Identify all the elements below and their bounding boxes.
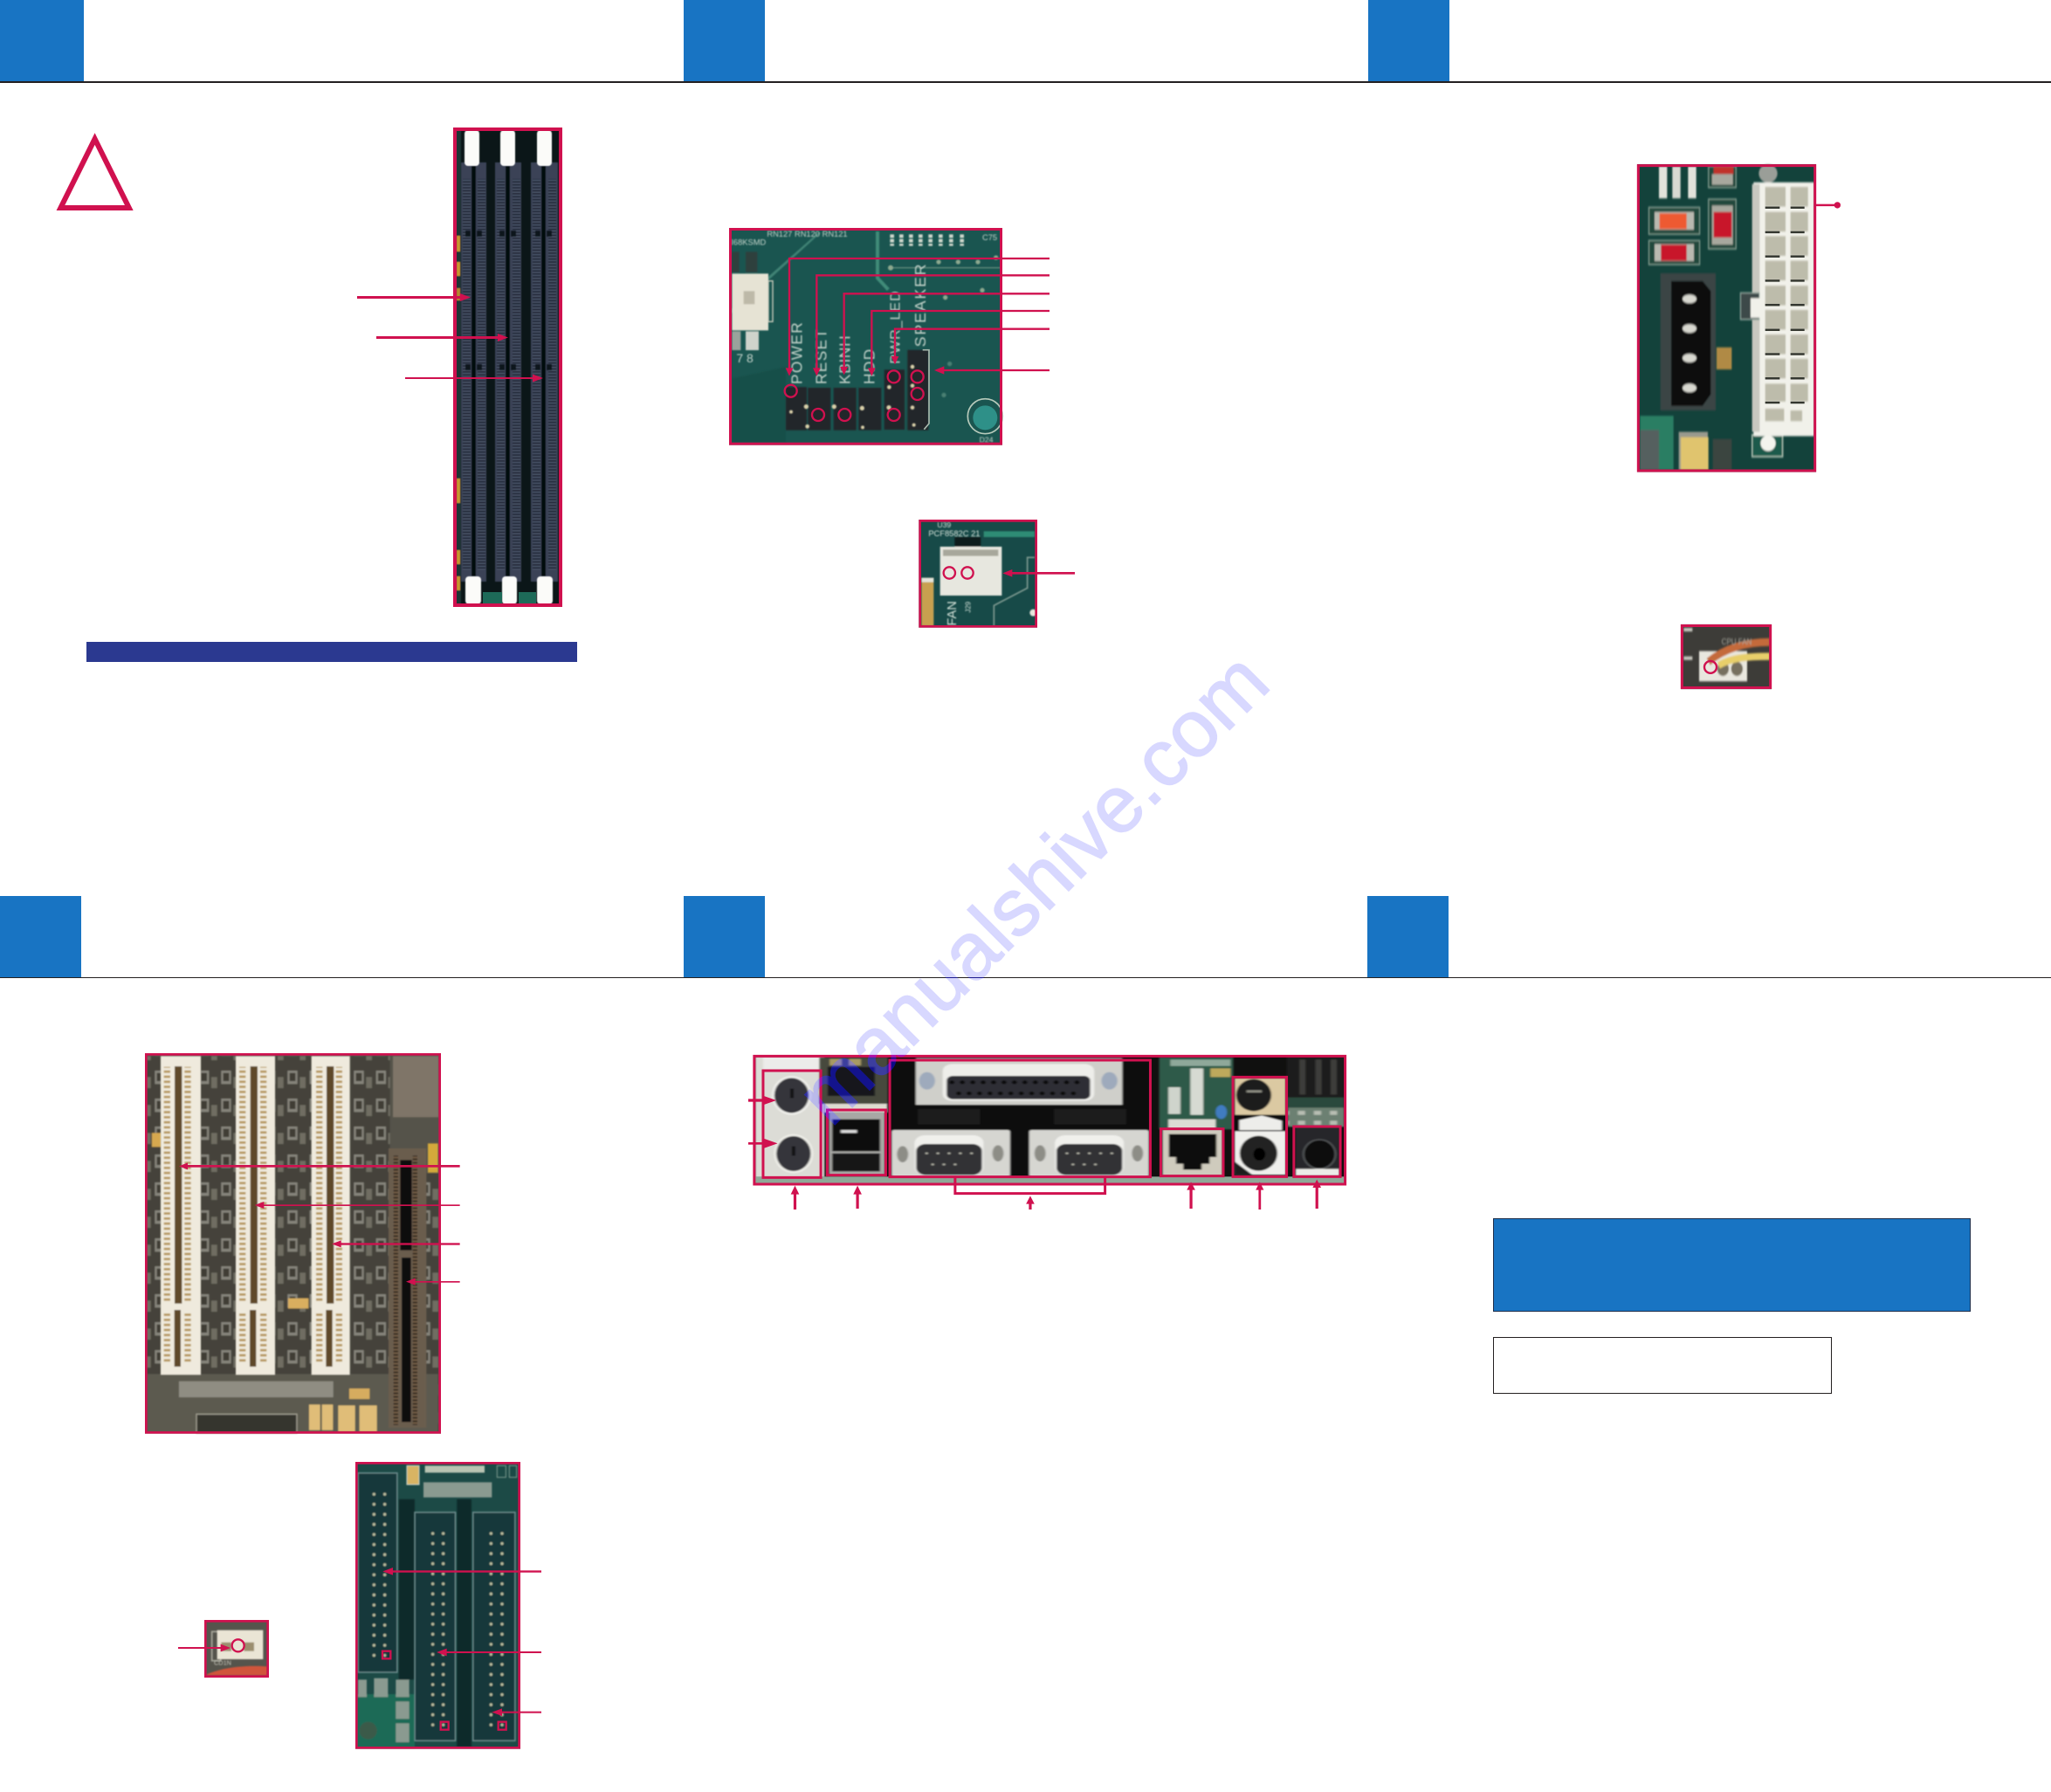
photo silkscreen labels: KBINH (836, 335, 853, 384)
arrow: slot 3 (405, 374, 543, 383)
leader lines (789, 258, 1050, 373)
white power connector (732, 252, 773, 350)
arrow: jack (1312, 1180, 1321, 1209)
PCI slot 3 (312, 1056, 350, 1375)
photo silkscreen labels (731, 230, 997, 445)
power photo components (1640, 164, 1814, 470)
board details (356, 1465, 517, 1748)
arrow: PS/2 lower (748, 1139, 778, 1148)
photo silkscreen labels: PWR_LED (889, 290, 904, 364)
fan photo details: J29 (965, 601, 973, 613)
arrow: network (1187, 1182, 1195, 1209)
CPU fan photo details: CPU FAN (1722, 637, 1752, 646)
section 6 number block (1367, 896, 1449, 977)
PCI slot 1 (161, 1056, 201, 1375)
photo bottom edge (755, 1176, 1345, 1183)
USB stack (820, 1058, 888, 1176)
IDE header 2 (473, 1513, 515, 1740)
fan pin circles (944, 567, 974, 579)
section 4 header (0, 896, 2051, 978)
section 1 header (0, 0, 2051, 83)
panel: CPU fan photo (1681, 624, 1772, 689)
leader arrowheads (786, 356, 944, 376)
floppy header (358, 1473, 397, 1672)
PS/2 plate (755, 1057, 824, 1177)
arrow: floppy (382, 1568, 541, 1575)
AGP slot (389, 1148, 426, 1428)
arrow: slot 2 (376, 334, 508, 341)
green board with LEDs (1160, 1058, 1233, 1129)
photo shading (731, 231, 1001, 443)
arrow: audio (1256, 1182, 1263, 1210)
photo silkscreen labels: RN127 RN120 RN121 (767, 230, 848, 238)
arrow: slot 1 (357, 293, 471, 301)
arrow: PCI 1 (179, 1162, 460, 1169)
connector pin shadows (1765, 207, 1805, 403)
panel: IDE and floppy headers photo (355, 1462, 541, 1749)
heatsink and jack (1287, 1057, 1345, 1175)
panel: rear I/O ports photo (748, 1056, 1346, 1210)
photo silkscreen labels: POWER (788, 321, 805, 384)
arrow: system fan (1002, 569, 1075, 577)
arrow: AGP (406, 1279, 460, 1285)
fan photo details: U39 (937, 520, 951, 529)
bracket: serial ports (955, 1177, 1105, 1210)
panel: front panel header photo (729, 228, 1050, 445)
arrow: PCI 2 (255, 1202, 460, 1209)
port frames (763, 1060, 1340, 1177)
white slot clips (465, 130, 553, 604)
section 2 number block (684, 0, 765, 81)
PCI slot 2 (236, 1056, 275, 1375)
board components (147, 1056, 439, 1433)
memory slot 2 (495, 162, 521, 582)
arrow: IDE 1 (437, 1649, 541, 1656)
section 5 number block (684, 896, 765, 977)
photo silkscreen labels: SPEAKER (912, 263, 929, 347)
photo silkscreen labels: D24 (980, 436, 994, 445)
panel: small connector photo (178, 1620, 269, 1678)
RJ45 network port (1162, 1129, 1222, 1175)
outer frame (754, 1056, 1346, 1184)
photo silkscreen labels: I68KSMD (731, 238, 767, 247)
IDE header 1 (415, 1513, 456, 1740)
audio jacks (1235, 1079, 1286, 1175)
CPU fan pin circle (1704, 661, 1717, 673)
section 3 number block (1368, 0, 1449, 81)
note box: outlined (1493, 1338, 1832, 1394)
photo silkscreen labels: C75 (982, 233, 997, 242)
fan photo details: PCF8582C 21 (928, 529, 980, 538)
arrow: USB (853, 1186, 862, 1209)
left edge components (456, 130, 461, 604)
memory slot 3 (531, 162, 558, 582)
icon: warning triangle (60, 139, 129, 208)
photo silkscreen labels: 7 8 (736, 351, 754, 365)
arrow: small connector (178, 1644, 231, 1651)
capacitor D24 (967, 399, 1002, 434)
parallel and serial ports (890, 1058, 1150, 1176)
note bar (86, 642, 577, 662)
note box: blue (1493, 1219, 1970, 1312)
fan photo details: FAN (946, 601, 960, 626)
photo silkscreen labels: RESET (813, 328, 830, 384)
callout dot: power connector (1816, 202, 1841, 209)
panel: system fan photo (919, 520, 1075, 628)
pin one markers (382, 1651, 506, 1730)
header pins (789, 365, 916, 429)
fan photo details (921, 520, 1036, 626)
panel: PCI and AGP slots photo (145, 1053, 460, 1434)
connector pin columns (1765, 187, 1808, 421)
memory slot 1 (461, 162, 486, 582)
pin headers (786, 350, 928, 431)
arrow: PS/2 label (791, 1186, 799, 1210)
arrow: IDE 2 (492, 1708, 541, 1716)
panel: memory sockets photo (357, 129, 561, 605)
photo silkscreen labels: HDD (861, 348, 878, 384)
arrow: PS/2 upper (748, 1095, 776, 1106)
memory photo frame (455, 129, 561, 605)
connector body: CD1N (214, 1659, 231, 1667)
panel: ATX power connector photo (1637, 164, 1841, 472)
pin circles (785, 370, 924, 421)
watermark: manualshive.com (781, 636, 1285, 1141)
arrow: PCI 3 (332, 1240, 460, 1247)
